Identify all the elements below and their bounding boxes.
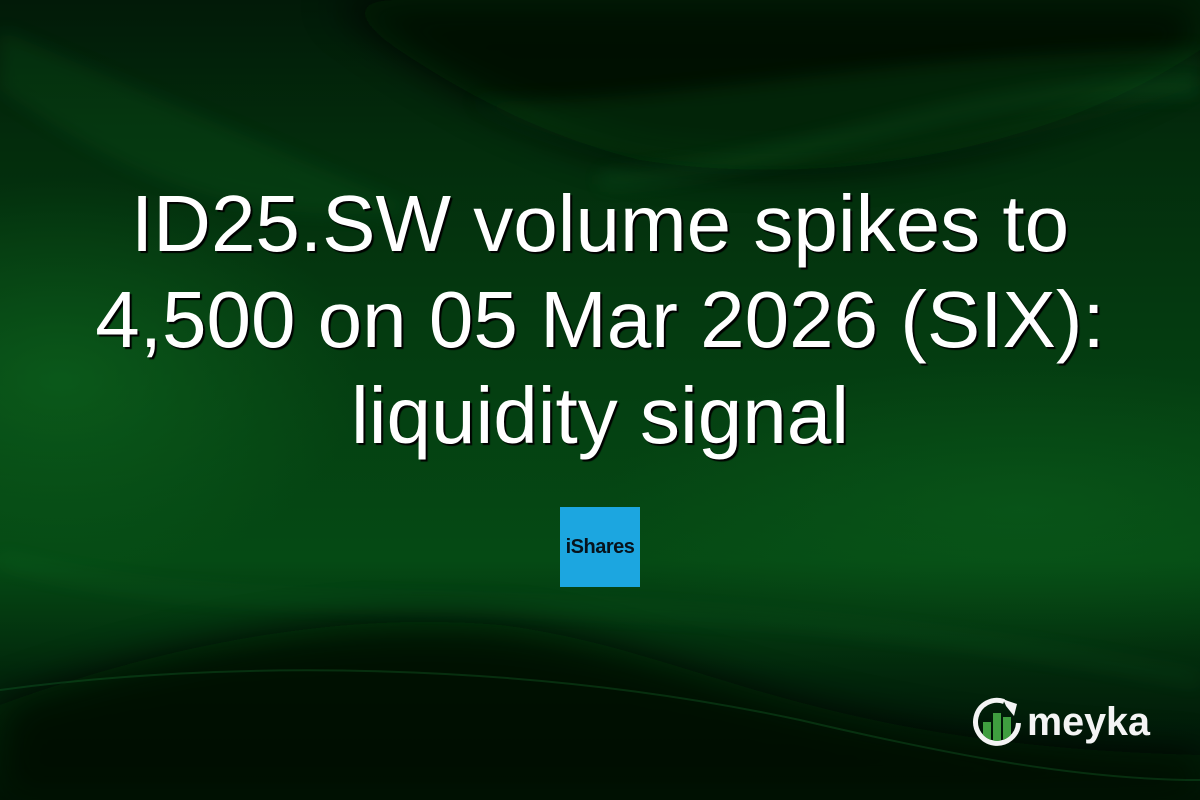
logo: iShares <box>560 507 640 587</box>
wordmark: meyka <box>1027 700 1151 744</box>
title: ID25.SW volume spikes to <box>131 179 1069 268</box>
logo: iShares: iShares <box>566 536 634 558</box>
title <box>95 179 1105 462</box>
icon: circular arrow with bars <box>976 699 1018 743</box>
title: 4,500 on 05 Mar 2026 (SIX): <box>95 275 1105 364</box>
title: liquidity signal <box>351 371 849 460</box>
logo: meyka <box>972 698 1151 746</box>
